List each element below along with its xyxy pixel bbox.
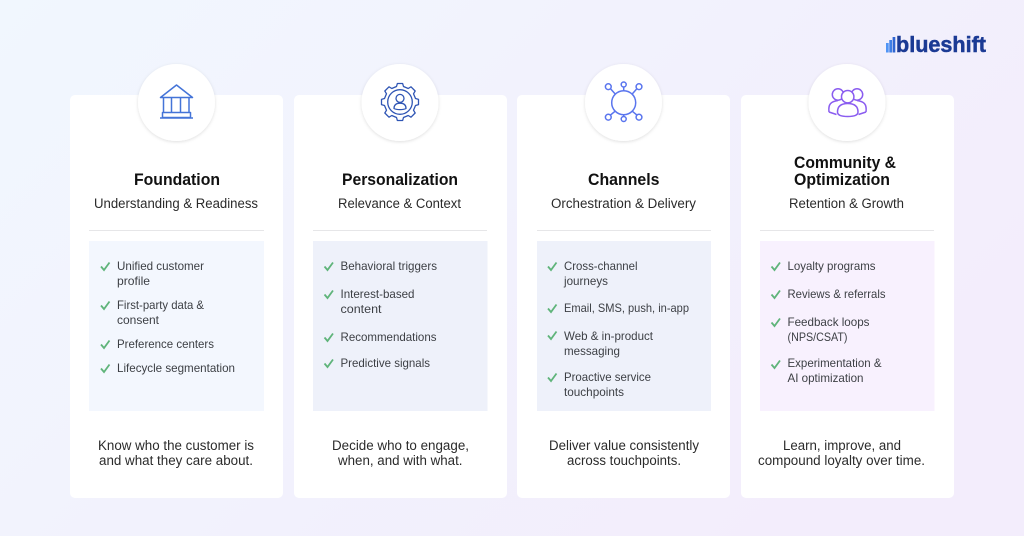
summary: across touchpoints. (567, 453, 681, 468)
icon: network hub (585, 64, 662, 141)
icon: gear person (362, 64, 438, 141)
checklist: (NPS/CSAT) (788, 330, 848, 344)
heading: Community & (794, 154, 896, 172)
panel: Community & Optimization (741, 64, 954, 498)
summary: compound loyalty over time. (758, 453, 925, 468)
checklist: Recommendations (340, 330, 436, 344)
checklist: First-party data & (117, 298, 204, 312)
heading: Foundation (134, 171, 220, 189)
checklist: Web & in-product (564, 329, 654, 343)
summary (758, 438, 925, 468)
checklist: Behavioral triggers (340, 259, 437, 273)
checklist (89, 241, 264, 411)
panel: Foundation (70, 64, 283, 498)
checklist: Preference centers (117, 337, 214, 351)
checklist: content (340, 302, 382, 316)
checklist: Predictive signals (340, 356, 430, 370)
subheading: Relevance & Context (338, 196, 461, 211)
summary (332, 438, 469, 468)
heading (794, 154, 896, 189)
subheading: Understanding & Readiness (94, 196, 258, 211)
checklist: Cross-channel (564, 259, 638, 273)
checklist (313, 241, 488, 411)
subheading: Retention & Growth (789, 196, 904, 211)
heading: Optimization (794, 171, 890, 189)
panel: Personalization (294, 64, 507, 498)
logo: blueshift: blueshift (896, 32, 987, 57)
checklist: Feedback loops (788, 315, 870, 329)
checklist: Proactive service (564, 370, 651, 384)
icon: bank (138, 64, 215, 141)
checklist: Email, SMS, push, in-app (564, 301, 689, 315)
subheading: Orchestration & Delivery (551, 196, 696, 211)
summary: when, and with what. (337, 453, 462, 468)
summary: Deliver value consistently (549, 438, 699, 453)
checklist: consent (117, 313, 160, 327)
checklist: journeys (563, 274, 608, 288)
summary: Decide who to engage, (332, 438, 469, 453)
checklist: Reviews & referrals (788, 287, 886, 301)
panel: Channels (517, 64, 730, 498)
checklist: Experimentation & (788, 356, 882, 370)
checklist: messaging (564, 344, 620, 358)
icon: people group (808, 64, 886, 141)
checklist: Interest-based (340, 287, 414, 301)
checklist: Unified customer (117, 259, 204, 273)
checklist: profile (117, 274, 150, 288)
summary (549, 438, 699, 468)
heading: Personalization (342, 171, 458, 189)
summary (98, 438, 254, 468)
heading: Channels (588, 171, 660, 189)
checklist (760, 241, 934, 411)
checklist: AI optimization (788, 371, 864, 385)
summary: and what they care about. (99, 453, 253, 468)
checklist: touchpoints (564, 385, 624, 399)
checklist (537, 241, 711, 411)
checklist: Lifecycle segmentation (117, 361, 235, 375)
summary: Learn, improve, and (783, 438, 901, 453)
summary: Know who the customer is (98, 438, 254, 453)
checklist: Loyalty programs (788, 259, 876, 273)
